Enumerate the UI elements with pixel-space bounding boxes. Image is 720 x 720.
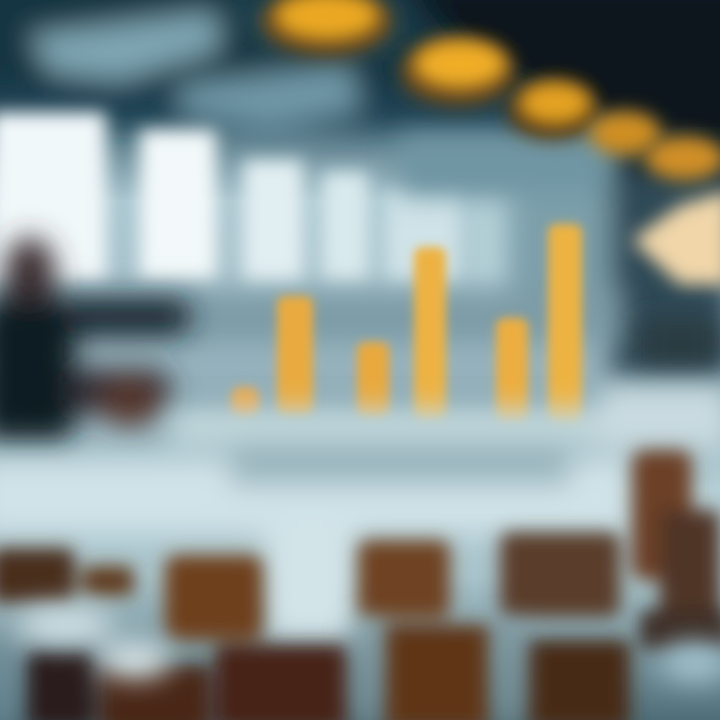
lamp 2 xyxy=(414,40,506,88)
lamp 4 xyxy=(589,111,661,155)
bar 2 xyxy=(277,296,313,416)
hanging lamps xyxy=(261,0,720,285)
ceiling xyxy=(0,0,720,210)
bar 5 xyxy=(496,318,528,424)
bar 1 xyxy=(231,387,259,417)
lamp 2 halo xyxy=(400,38,516,106)
lamp 1 xyxy=(275,0,379,40)
table xyxy=(0,385,720,640)
chairs xyxy=(0,450,720,720)
chair front row xyxy=(25,650,95,720)
windows xyxy=(0,112,510,285)
chair back row xyxy=(0,548,75,603)
bar 4 xyxy=(414,247,446,421)
bar 3 xyxy=(357,342,389,418)
lamp 1 halo xyxy=(261,0,393,56)
table reflections xyxy=(0,607,720,720)
lamp 3 xyxy=(519,82,591,124)
person silhouette xyxy=(0,237,720,440)
lamp 6 xyxy=(632,190,720,285)
lamp 3 halo xyxy=(507,80,599,140)
right wall xyxy=(0,135,720,380)
lamp 5 xyxy=(645,136,720,180)
bar chart xyxy=(231,224,582,424)
bar 6 xyxy=(548,224,582,424)
